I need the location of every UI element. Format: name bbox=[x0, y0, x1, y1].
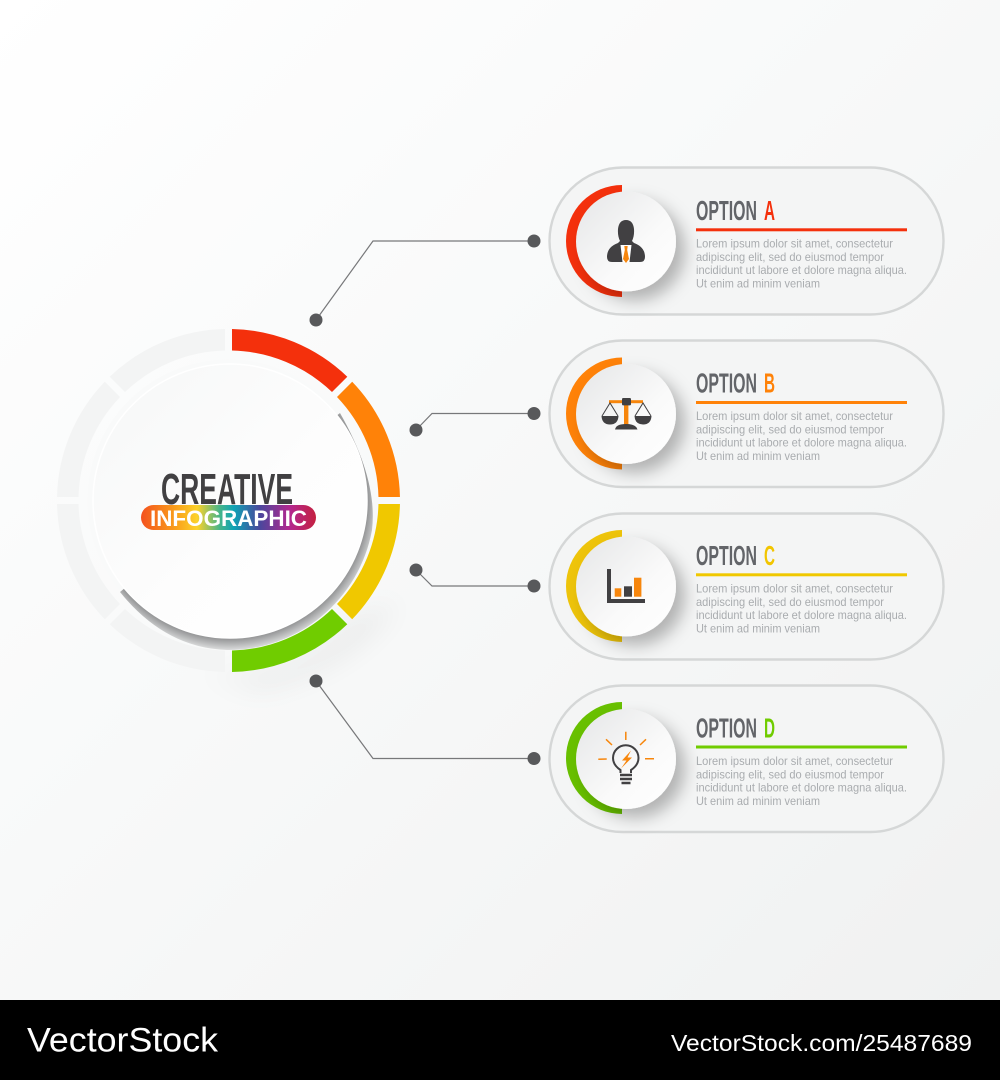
body text: Ut enim ad minim veniam bbox=[696, 622, 820, 636]
title rule bbox=[696, 573, 907, 576]
icon disc bbox=[576, 709, 676, 809]
option letter: B bbox=[764, 368, 775, 398]
colored arc bbox=[566, 530, 622, 642]
option letter: C bbox=[764, 540, 775, 571]
soft ground shadow bbox=[190, 600, 400, 690]
body text: Ut enim ad minim veniam bbox=[696, 276, 820, 290]
connector A bbox=[316, 241, 534, 320]
colored arc bbox=[566, 702, 622, 814]
red segment bbox=[232, 329, 347, 392]
pill outline bbox=[550, 686, 944, 832]
grey ring segments bbox=[57, 329, 225, 672]
connector lines bbox=[316, 241, 534, 758]
body text: Ut enim ad minim veniam bbox=[696, 794, 820, 808]
body text: incididunt ut labore et dolore magna aliqua. bbox=[696, 436, 907, 450]
body text bbox=[696, 409, 907, 463]
panel: option B bbox=[550, 340, 944, 487]
body text: adipiscing elit, sed do eiusmod tempor bbox=[696, 422, 884, 436]
pill outline bbox=[550, 340, 944, 487]
main disc bbox=[93, 364, 367, 638]
option title: OPTION bbox=[696, 712, 757, 744]
body text bbox=[696, 236, 907, 290]
body text: incididunt ut labore et dolore magna aliqua. bbox=[696, 781, 907, 795]
option title: OPTION bbox=[696, 368, 757, 398]
option letter: A bbox=[764, 195, 775, 226]
panel: option D bbox=[550, 686, 944, 832]
heading: CREATIVE: CREATIVE bbox=[161, 465, 293, 514]
icon disc bbox=[576, 536, 676, 636]
panel: option A bbox=[550, 168, 944, 314]
body text bbox=[696, 754, 907, 808]
footer bar bbox=[0, 1000, 1000, 1080]
option letter: D bbox=[764, 712, 775, 744]
connector B bbox=[416, 414, 534, 430]
title rule bbox=[696, 746, 907, 748]
icon: scales bbox=[602, 398, 652, 430]
title rule bbox=[696, 401, 907, 404]
crescent shadow bbox=[120, 413, 373, 650]
icon disc bbox=[576, 364, 676, 464]
body text: Lorem ipsum dolor sit amet, consectetur bbox=[696, 582, 893, 596]
heading: INFOGRAPHIC: INFOGRAPHIC bbox=[150, 506, 307, 531]
colored arc bbox=[566, 185, 622, 297]
orange segment bbox=[337, 382, 400, 497]
body text: Ut enim ad minim veniam bbox=[696, 449, 820, 463]
green segment bbox=[232, 609, 347, 672]
footer brand: VectorStock bbox=[27, 1022, 219, 1060]
title rule bbox=[696, 228, 907, 231]
colored arc bbox=[566, 358, 622, 470]
body text bbox=[696, 582, 907, 636]
body text: adipiscing elit, sed do eiusmod tempor bbox=[696, 595, 884, 609]
body text: Lorem ipsum dolor sit amet, consectetur bbox=[696, 754, 893, 768]
rainbow badge bbox=[141, 505, 316, 530]
icon: businessman bbox=[607, 220, 645, 263]
connector D bbox=[316, 681, 534, 758]
icon: light bulb bbox=[598, 732, 654, 783]
body text: adipiscing elit, sed do eiusmod tempor bbox=[696, 767, 884, 781]
yellow segment bbox=[337, 504, 400, 619]
body text: adipiscing elit, sed do eiusmod tempor bbox=[696, 250, 884, 264]
connector dots bbox=[310, 234, 540, 765]
footer url: VectorStock.com/25487689 bbox=[671, 1030, 972, 1056]
inner light band bbox=[88, 360, 370, 642]
icon: bar chart bbox=[607, 569, 645, 603]
pill outline bbox=[550, 168, 944, 314]
body text: incididunt ut labore et dolore magna aliqua. bbox=[696, 608, 907, 622]
body text: Lorem ipsum dolor sit amet, consectetur bbox=[696, 236, 893, 250]
body text: incididunt ut labore et dolore magna aliqua. bbox=[696, 263, 907, 277]
option title: OPTION bbox=[696, 195, 757, 226]
icon disc bbox=[576, 192, 676, 292]
main circular graphic bbox=[57, 329, 400, 690]
connector C bbox=[416, 570, 534, 586]
option title: OPTION bbox=[696, 540, 757, 571]
body text: Lorem ipsum dolor sit amet, consectetur bbox=[696, 409, 893, 423]
pill outline bbox=[550, 514, 944, 660]
panel: option C bbox=[550, 514, 944, 660]
